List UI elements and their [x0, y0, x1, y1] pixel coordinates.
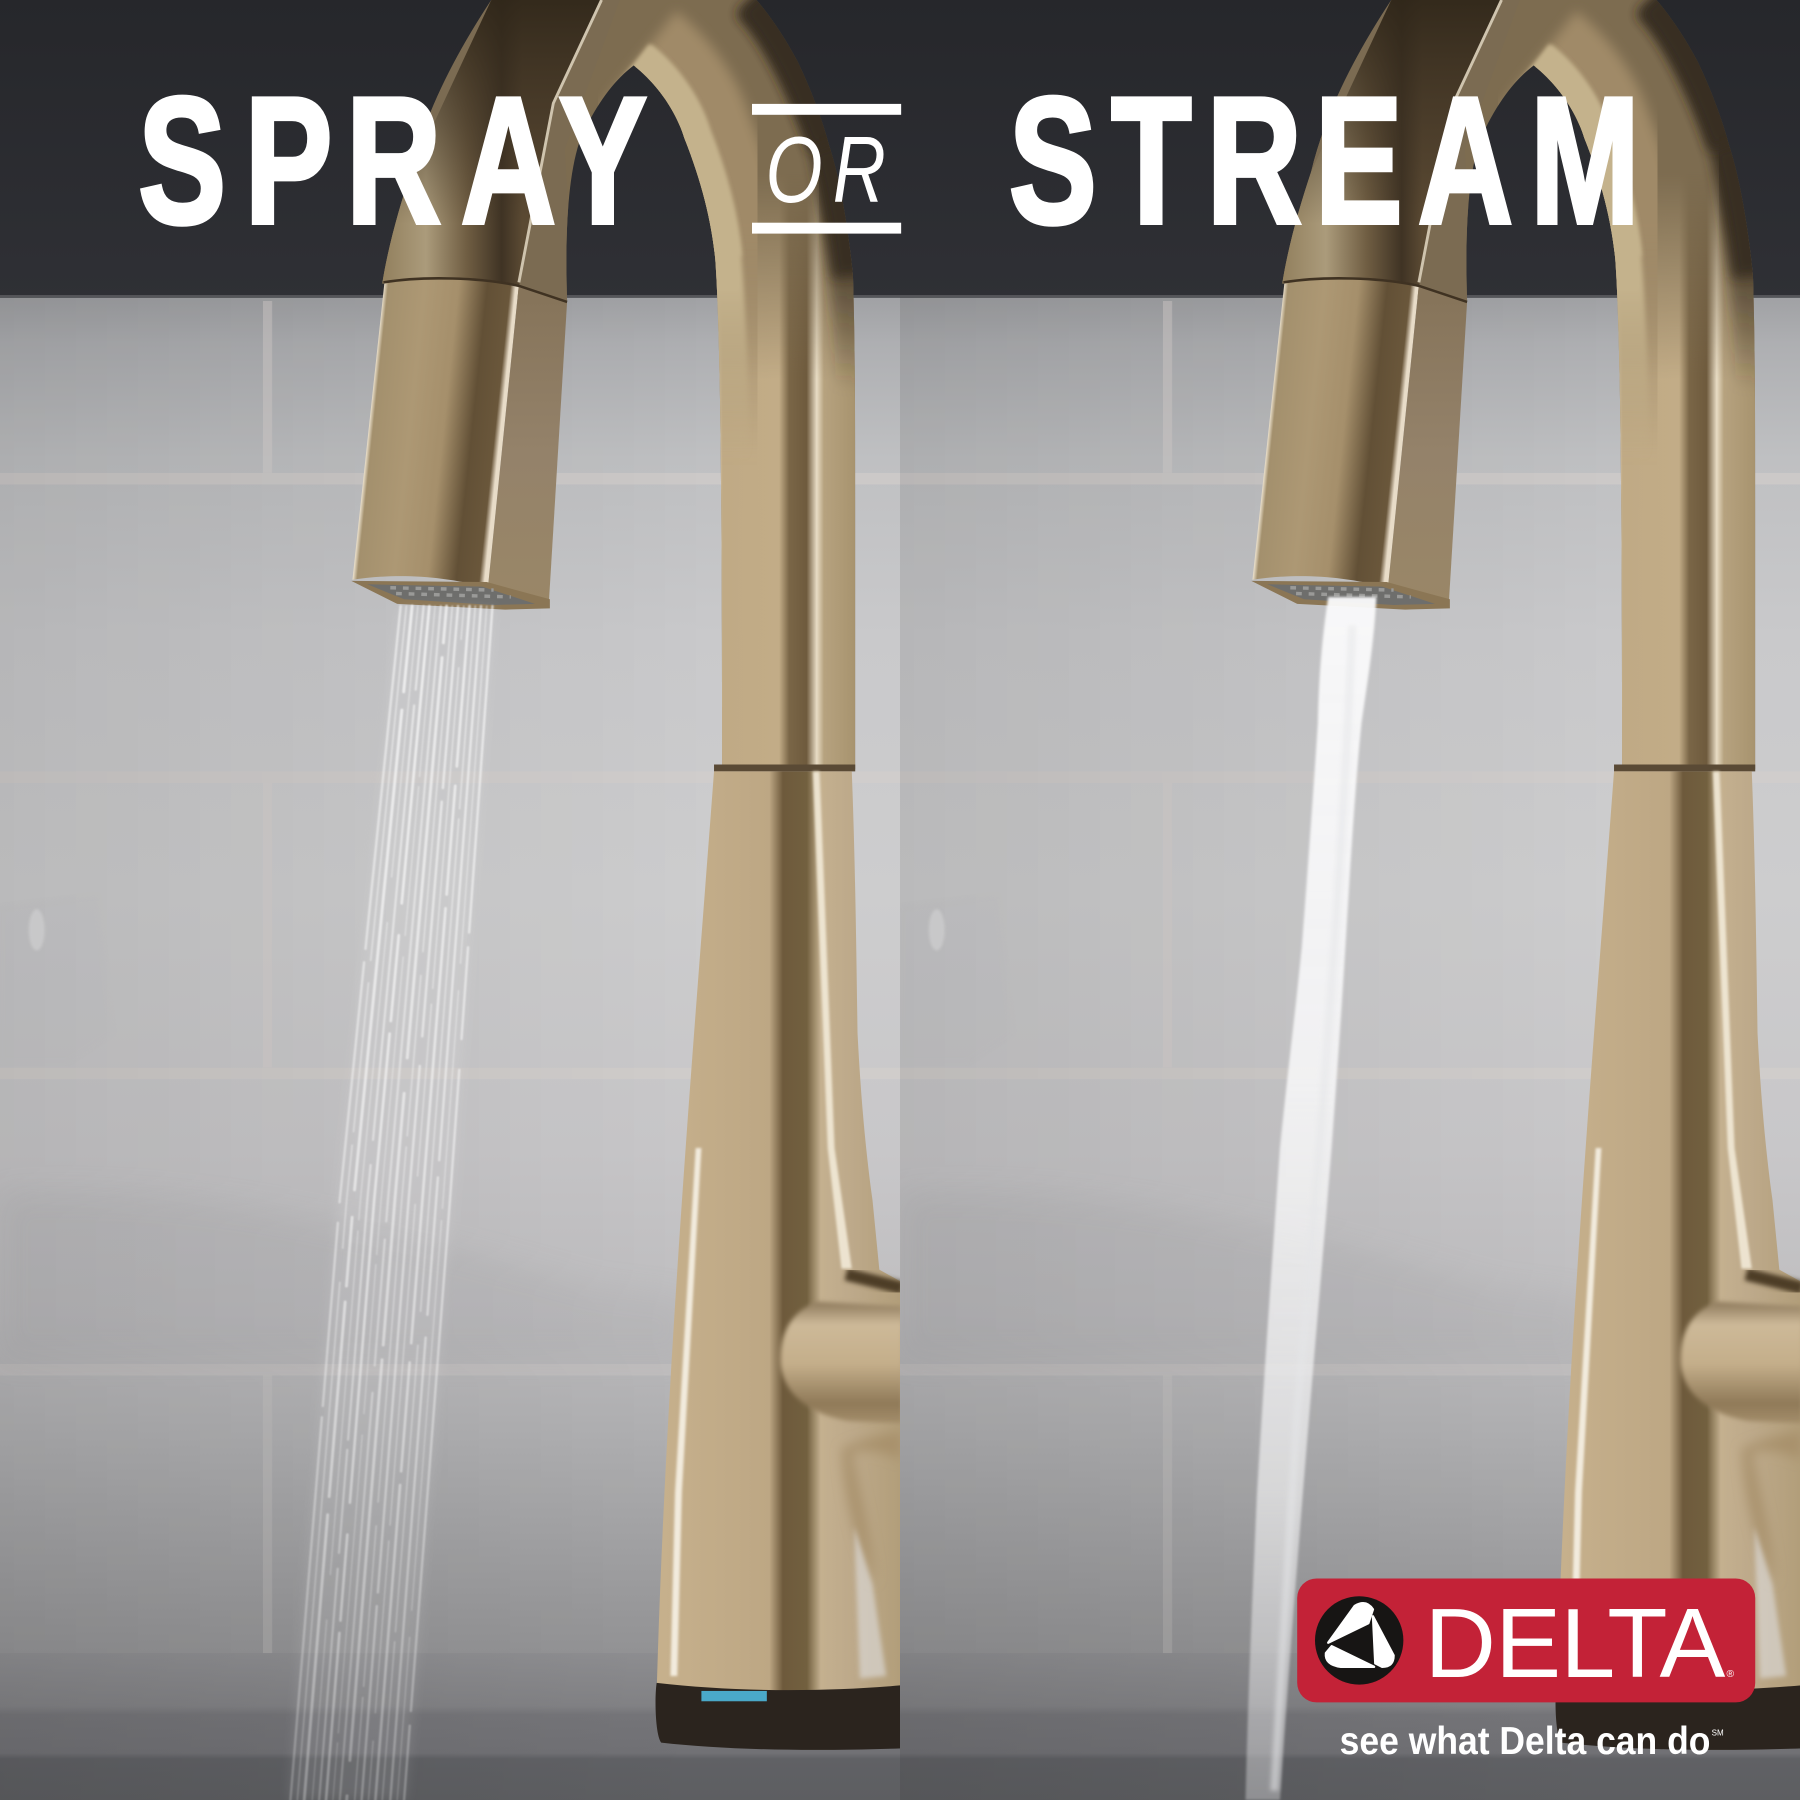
water: spray streaks [288, 606, 495, 1800]
logo wordmark: DELTA [1425, 1588, 1726, 1698]
title: SPRAY: SPRAY [138, 61, 647, 262]
panel: spray [0, 0, 902, 1800]
faucet and tiled wall, left [0, 0, 902, 1800]
faucet and tiled wall, right [900, 0, 1800, 1800]
title connector: OR with rules [752, 104, 901, 234]
tagline: SM [1712, 1729, 1724, 1738]
logo: Delta badge [1297, 1578, 1755, 1702]
tagline: see what Delta can do [1340, 1720, 1710, 1763]
water: solid stream [1246, 597, 1376, 1800]
registered mark: ® [1727, 1669, 1735, 1680]
panel: stream [900, 0, 1800, 1800]
title: STREAM: STREAM [1009, 61, 1640, 262]
icon: Delta triangle mark [1315, 1596, 1403, 1685]
title connector: OR with rules: OR [766, 117, 886, 222]
